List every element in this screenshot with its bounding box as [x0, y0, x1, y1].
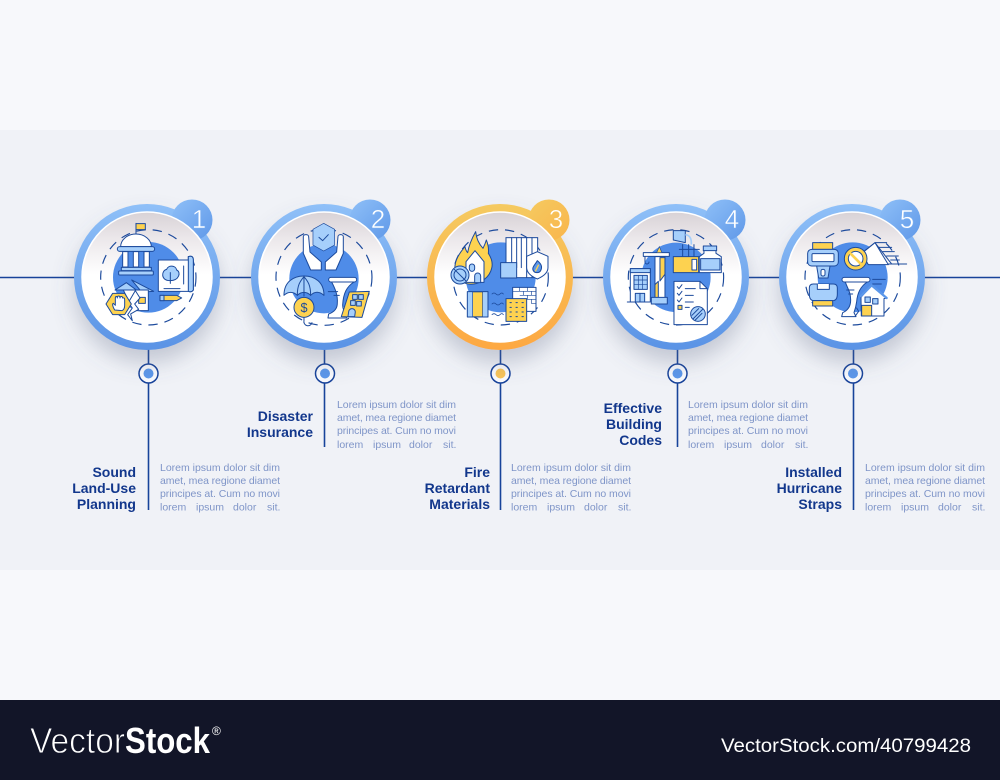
step 4 heading: Effective: [604, 400, 662, 416]
step 5 disc: [787, 212, 917, 342]
icon: fire retardant materials: [451, 230, 548, 325]
step 1 disc: [82, 212, 212, 342]
step 5 heading: Hurricane: [777, 480, 842, 496]
step 4 disc: [611, 212, 741, 342]
step 4 number: 4: [725, 204, 739, 234]
step 3 ring: [427, 204, 573, 350]
step 4 text: amet, mea regione diamet: [688, 412, 808, 424]
step 2: [247, 200, 456, 451]
step 4 text: ipsum: [724, 439, 752, 451]
step 3 heading: Materials: [429, 496, 490, 512]
step 1: [72, 200, 280, 514]
step 4: [603, 200, 808, 451]
step 2 text: principes at. Cum no movi: [337, 425, 456, 437]
step 2 text: lorem: [337, 439, 364, 451]
step 1 text: principes at. Cum no movi: [160, 488, 280, 500]
step 3 number: 3: [549, 204, 563, 234]
step 5 text: ipsum: [901, 502, 929, 514]
step 1 text: sit.: [267, 502, 280, 514]
step 3 badge: [528, 200, 570, 240]
step 1 heading: Sound: [92, 464, 136, 480]
footer logo: Vector: [30, 720, 125, 761]
step 5 text: lorem: [865, 502, 892, 514]
step 3 disc: [435, 212, 565, 342]
step 2 text: Lorem ipsum dolor sit dim: [337, 399, 456, 411]
step 2 badge: [350, 200, 390, 240]
step 5 connector: [844, 345, 862, 510]
step 1 badge: [172, 200, 212, 240]
icon: disaster insurance: $: [300, 301, 307, 315]
step 3 text: Lorem ipsum dolor sit dim: [511, 462, 631, 474]
step 4 text: Lorem ipsum dolor sit dim: [688, 399, 808, 411]
icon: land-use planning: [101, 223, 196, 325]
step 1 text: amet, mea regione diamet: [160, 475, 280, 487]
infographic band: [0, 130, 1000, 570]
step 2 heading: Insurance: [247, 424, 313, 440]
step 2 heading: Disaster: [258, 408, 314, 424]
step 3 text: lorem: [511, 502, 538, 514]
step 4 text: sit.: [795, 439, 808, 451]
step 5 ring: [779, 204, 925, 350]
step 1 text: ipsum: [196, 502, 224, 514]
step 5 text: principes at. Cum no movi: [865, 488, 985, 500]
step 5 text: Lorem ipsum dolor sit dim: [865, 462, 985, 474]
step 2 text: ipsum: [373, 439, 401, 451]
step 2 ring: [251, 204, 397, 350]
step 1 heading: Land-Use: [72, 480, 136, 496]
icon: disaster insurance: [276, 223, 372, 326]
step 1 text: Lorem ipsum dolor sit dim: [160, 462, 280, 474]
icon: hurricane straps: [805, 230, 907, 325]
step 4 connector: [668, 345, 687, 447]
step 4 text: lorem: [688, 439, 715, 451]
step 5 text: dolor: [938, 502, 962, 514]
step 4 heading: Building: [606, 416, 662, 432]
step 2 text: sit.: [443, 439, 456, 451]
step 5 heading: Installed: [785, 464, 842, 480]
step 1 text: lorem: [160, 502, 187, 514]
step 3 text: ipsum: [547, 502, 575, 514]
step 2 number: 2: [371, 204, 385, 234]
step 5 text: amet, mea regione diamet: [865, 475, 985, 487]
step 4 text: principes at. Cum no movi: [688, 425, 808, 437]
step 3 heading: Retardant: [425, 480, 490, 496]
step 2 text: dolor: [409, 439, 433, 451]
footer logo: Stock: [125, 720, 211, 761]
step 5 heading: Straps: [798, 496, 842, 512]
step 2 text: amet, mea regione diamet: [337, 412, 456, 424]
horizontal timeline: [0, 276, 1000, 278]
icon: effective building codes: [627, 230, 724, 325]
step 4 badge: [704, 200, 746, 240]
step 5 badge: [880, 200, 920, 240]
step 1 heading: Planning: [77, 496, 136, 512]
step 3 text: principes at. Cum no movi: [511, 488, 631, 500]
step 5 number: 5: [900, 204, 914, 234]
step 1 connector: [139, 345, 158, 510]
step 3 text: amet, mea regione diamet: [511, 475, 631, 487]
step 3 connector: [491, 345, 510, 510]
step 1 ring: [74, 204, 220, 350]
step 3 text: sit.: [618, 502, 631, 514]
footer logo: ®: [212, 724, 221, 738]
step 5 text: sit.: [972, 502, 985, 514]
footer bar: [0, 700, 1000, 780]
step 4 text: dolor: [761, 439, 785, 451]
step 2 connector: [316, 345, 334, 447]
step 1 text: dolor: [233, 502, 257, 514]
step 3 text: dolor: [584, 502, 608, 514]
step 1 number: 1: [192, 204, 206, 234]
step 4 heading: Codes: [619, 432, 662, 448]
footer image id: VectorStock.com/40799428: [721, 735, 971, 757]
step 3 heading: Fire: [464, 464, 490, 480]
step 3: [425, 200, 631, 514]
step 2 disc: [259, 212, 389, 342]
step 5: [777, 200, 985, 514]
step 4 ring: [603, 204, 749, 350]
